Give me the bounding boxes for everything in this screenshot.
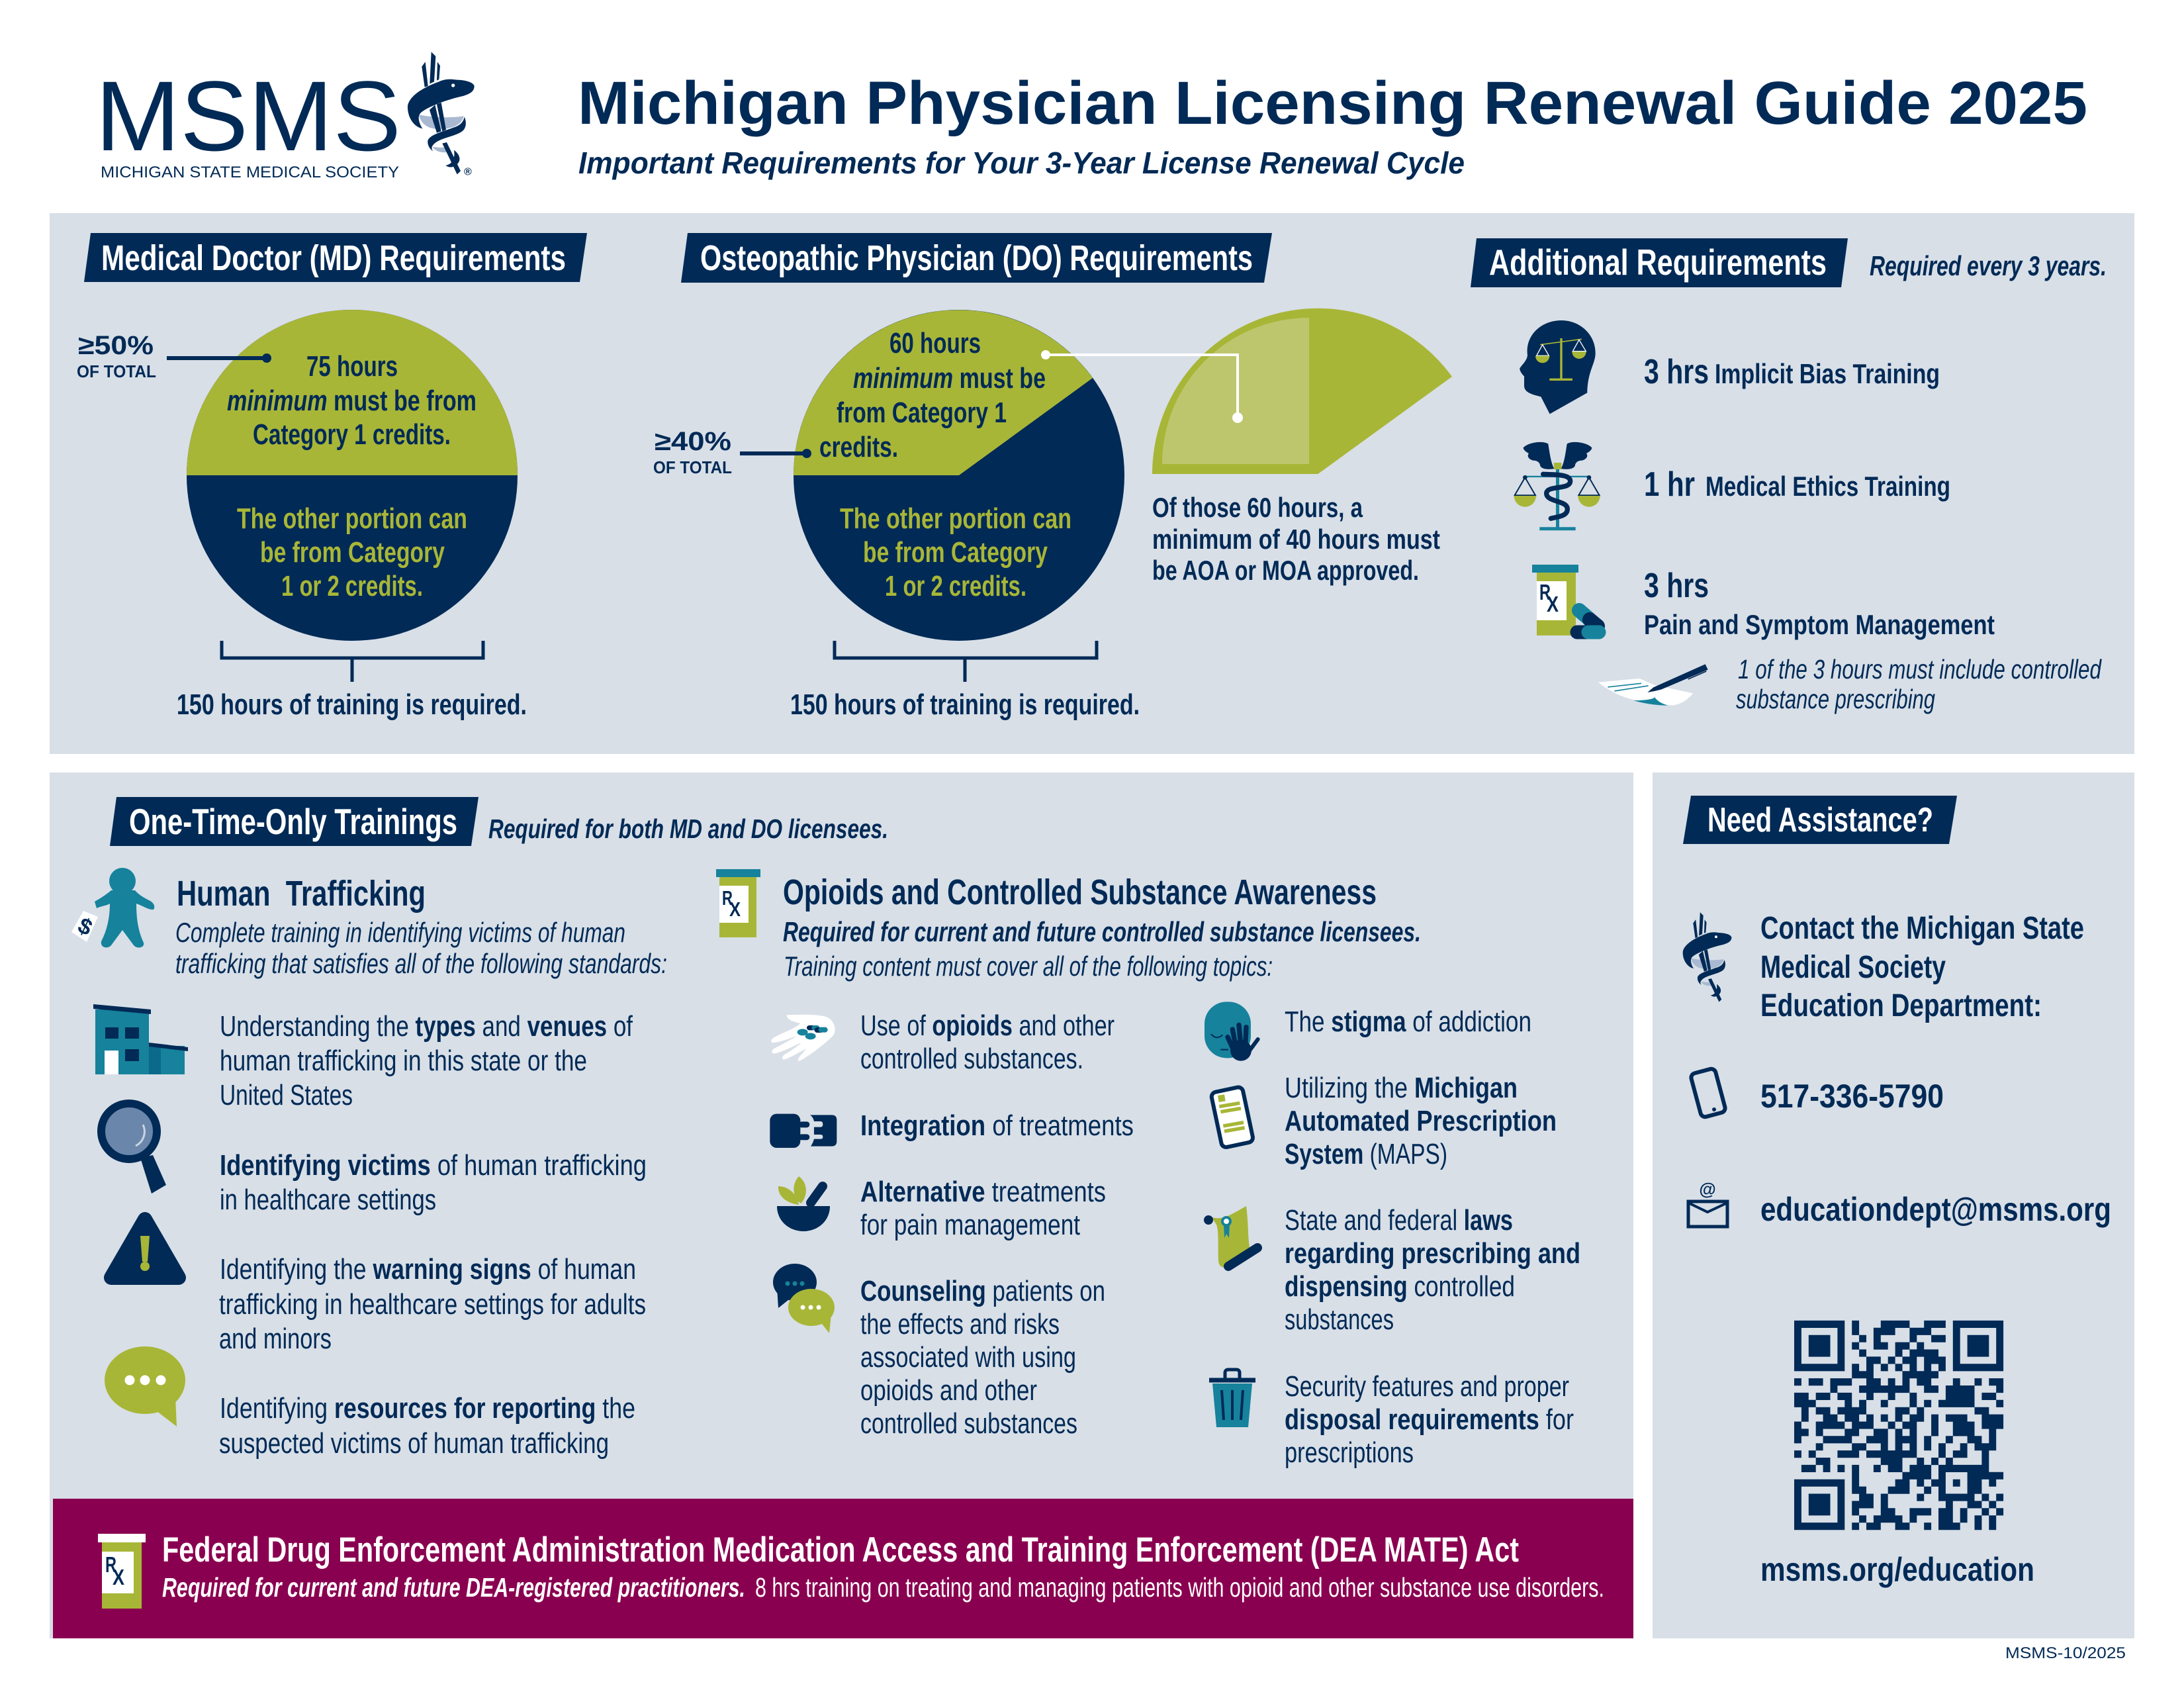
text: resources for reporting bbox=[219, 1392, 635, 1460]
icon: hand with pills bbox=[771, 1015, 835, 1061]
text: opioids intro: Training content must cover all of the following topics: bbox=[784, 951, 1273, 982]
heading: opioids: Opioids and Controlled Substance Awareness bbox=[783, 872, 1377, 912]
icon: face with stop hand bbox=[1205, 1002, 1258, 1061]
icon: mortar and pestle bbox=[777, 1176, 830, 1231]
heading: additional requirements: Additional Requirements bbox=[1489, 242, 1827, 283]
icon: magnifying glass bbox=[101, 1103, 166, 1194]
title: Michigan Physician Licensing Renewal Guide 2025 bbox=[578, 70, 2087, 137]
pie chart: MD hours: The other portion can bbox=[237, 502, 467, 535]
text: phone number: 517-336-5790 bbox=[1760, 1078, 1944, 1115]
text: counseling patients: the effects and risks bbox=[860, 1308, 1060, 1340]
icon: prescription bottle with capsules: X bbox=[1547, 592, 1559, 616]
heading: need assistance bbox=[1683, 796, 1957, 844]
heading: DO requirements bbox=[681, 233, 1272, 283]
heading: one-time-only trainings bbox=[110, 797, 478, 846]
text: counseling patients: controlled substances bbox=[860, 1407, 1077, 1440]
icon: building bbox=[93, 1004, 188, 1074]
text: types and venues bbox=[220, 1010, 633, 1111]
callout: at least 50 percent: ≥50% bbox=[78, 331, 154, 360]
text: alternative treatments: Alternative treatments bbox=[860, 1176, 1106, 1208]
icon: prescription bottle with capsules: R bbox=[1539, 580, 1551, 604]
text: AOA or MOA note bbox=[1152, 492, 1440, 586]
pie chart: MD hours: Category 1 credits. bbox=[253, 418, 451, 451]
icon: small prescription bottle: X bbox=[729, 898, 741, 921]
icon: speech bubble bbox=[105, 1346, 185, 1427]
heading: one-time-only trainings: One-Time-Only Trainings bbox=[129, 801, 457, 842]
heading: DO requirements: Osteopathic Physician (DO) Requirements bbox=[700, 238, 1253, 278]
chart: enlarged wedge of DO category 1 hours bbox=[1152, 308, 1452, 474]
icon: email envelope: @ bbox=[1699, 1179, 1716, 1199]
icon: head with scales bbox=[1520, 320, 1596, 414]
heading: need assistance: Need Assistance? bbox=[1707, 801, 1933, 839]
bracket: MD 150 hours: 150 hours of training is required. bbox=[177, 688, 527, 721]
text: contact: Contact the Michigan State bbox=[1760, 911, 2084, 946]
icon: trash can bbox=[1209, 1370, 1255, 1427]
text: identifying victims bbox=[220, 1149, 647, 1216]
callout: at least 40 percent: ≥40% bbox=[655, 427, 731, 456]
text: state and federal laws: dispensing controlled bbox=[1285, 1270, 1515, 1303]
text: email address: educationdept@msms.org bbox=[1760, 1191, 2111, 1228]
icon: trafficked person with price tag: $ bbox=[74, 913, 96, 941]
pie chart: DO hours bbox=[794, 310, 1124, 641]
icon: pen and prescription paper bbox=[1598, 664, 1708, 706]
text: pain and symptom management: Pain and Symptom Management bbox=[1644, 609, 1995, 640]
text: MAPS: System (MAPS) bbox=[1285, 1138, 1447, 1170]
text: identifying victims: Identifying victims of human trafficking bbox=[220, 1149, 647, 1182]
text: MAPS bbox=[1285, 1072, 1557, 1170]
note: required for both: Required for both MD and DO licensees. bbox=[488, 814, 888, 844]
text: medical ethics training: Medical Ethics Training bbox=[1706, 471, 1950, 502]
text: pain and symptom management bbox=[1644, 567, 1995, 640]
icon: bottle on banner: X bbox=[113, 1565, 124, 1589]
text: opioids intro: Required for current and future controlled substance licensees. bbox=[783, 916, 1421, 947]
QR code bbox=[1794, 1324, 2003, 1526]
icon: chat bubbles bbox=[773, 1264, 835, 1333]
text: use of opioids: Use of opioids and other bbox=[860, 1009, 1115, 1042]
text: security and disposal: Security features and proper bbox=[1285, 1370, 1569, 1403]
pie chart: MD hours: minimum must be from bbox=[227, 385, 477, 417]
text: contact: Education Department: bbox=[1760, 988, 2042, 1023]
text: counseling patients: Counseling patients on bbox=[860, 1275, 1105, 1307]
pie chart: DO hours: The other portion can bbox=[840, 502, 1071, 535]
text: security and disposal: prescriptions bbox=[1285, 1436, 1414, 1469]
pie chart: DO hours: minimum must be bbox=[853, 362, 1046, 395]
icon: plug bbox=[770, 1114, 837, 1148]
icon: scroll with ribbon bbox=[1204, 1206, 1257, 1268]
text: controlled substance note bbox=[1736, 654, 2102, 714]
text: controlled substance note: substance prescribing bbox=[1736, 684, 1935, 714]
footer code: MSMS-10/2025 bbox=[2005, 1644, 2126, 1662]
heading: MD requirements: Medical Doctor (MD) Requirements bbox=[101, 238, 566, 278]
text: use of opioids: controlled substances. bbox=[860, 1043, 1083, 1075]
text: types and venues: United States bbox=[220, 1079, 353, 1111]
panel: need assistance bbox=[1653, 773, 2134, 1638]
text: types and venues: Understanding the types and venues of bbox=[220, 1010, 633, 1043]
banner: DEA MATE Act: 8 hrs training on treating and managing patients with opioid and other substance use disorders. bbox=[755, 1572, 1604, 1603]
MSMS logo: MSMS bbox=[95, 60, 401, 171]
pie chart: MD hours: 1 or 2 credits. bbox=[281, 570, 423, 602]
text: security and disposal: disposal requirements for bbox=[1285, 1403, 1574, 1436]
heading: human trafficking: Human Trafficking bbox=[177, 874, 426, 914]
text: warning signs: trafficking in healthcare settings for adults bbox=[219, 1288, 646, 1321]
text: resources for reporting: suspected victims of human trafficking bbox=[219, 1427, 609, 1460]
text: use of opioids bbox=[860, 1009, 1115, 1075]
pie chart: DO hours: be from Category bbox=[863, 536, 1048, 569]
text: integration: Integration of treatments bbox=[860, 1109, 1134, 1142]
text: security and disposal bbox=[1285, 1370, 1574, 1469]
panel: one-time-only trainings bbox=[50, 773, 1633, 1638]
pie chart: MD hours: 75 hours bbox=[306, 350, 398, 383]
bracket: DO 150 hours: 150 hours of training is required. bbox=[790, 688, 1140, 721]
note: required every 3 years: Required every 3 years. bbox=[1870, 250, 2107, 281]
text: human trafficking intro bbox=[175, 917, 667, 979]
text: warning signs: Identifying the warning signs of human bbox=[220, 1253, 636, 1286]
text: AOA or MOA note: Of those 60 hours, a bbox=[1152, 492, 1363, 523]
text: implicit bias training: Implicit Bias Training bbox=[1715, 358, 1940, 389]
text: human trafficking intro: Complete training in identifying victims of human bbox=[175, 917, 625, 948]
icon: trafficked person with price tag bbox=[71, 868, 154, 947]
icon: phone bbox=[1690, 1068, 1726, 1118]
text: identifying victims: in healthcare settings bbox=[220, 1184, 436, 1216]
icon: prescription bottle with capsules bbox=[1532, 565, 1599, 635]
MSMS logo: ® bbox=[464, 166, 472, 177]
icon: MSMS snake emblem bbox=[1683, 912, 1731, 1002]
text: stigma: The stigma of addiction bbox=[1285, 1006, 1531, 1038]
text: counseling patients: associated with using bbox=[860, 1341, 1076, 1374]
banner: DEA MATE Act: Federal Drug Enforcement Administration Medication Access and Training Enforcement (DEA MATE) Act bbox=[162, 1530, 1519, 1570]
text: MAPS: Automated Prescription bbox=[1285, 1105, 1557, 1137]
bracket: DO 150 hours bbox=[790, 641, 1140, 721]
text: state and federal laws: substances bbox=[1285, 1303, 1394, 1336]
icon: email envelope bbox=[1688, 1179, 1727, 1227]
text: contact bbox=[1760, 911, 2084, 1023]
pie chart: MD hours bbox=[187, 310, 518, 641]
text: warning signs: and minors bbox=[219, 1323, 332, 1355]
text: alternative treatments bbox=[860, 1176, 1106, 1241]
icon: bottle on banner bbox=[98, 1534, 146, 1609]
heading: additional requirements bbox=[1471, 238, 1848, 287]
icon: small prescription bottle bbox=[716, 869, 760, 937]
text: warning signs bbox=[219, 1253, 646, 1355]
callout: at least 40 percent bbox=[653, 427, 811, 477]
heading: MD requirements bbox=[84, 233, 587, 282]
text: state and federal laws: regarding prescribing and bbox=[1285, 1237, 1580, 1270]
pie chart: DO hours: 60 hours bbox=[889, 327, 981, 359]
text: MAPS: Utilizing the Michigan bbox=[1285, 1072, 1518, 1104]
pie chart: DO hours: credits. bbox=[819, 431, 898, 463]
callout: at least 40 percent: OF TOTAL bbox=[653, 457, 732, 477]
banner: DEA MATE Act bbox=[53, 1499, 1633, 1638]
panel: licence requirements bbox=[50, 213, 2134, 754]
callout: at least 50 percent: OF TOTAL bbox=[77, 361, 156, 381]
text: alternative treatments: for pain management bbox=[860, 1209, 1080, 1241]
text: implicit bias training bbox=[1644, 353, 1940, 391]
text: opioids intro bbox=[783, 916, 1421, 982]
text: state and federal laws bbox=[1285, 1204, 1580, 1336]
pie chart: MD hours: be from Category bbox=[260, 536, 445, 569]
icon: warning triangle bbox=[111, 1219, 179, 1278]
icon: bottle on banner: R bbox=[105, 1552, 116, 1577]
text: website: msms.org/education bbox=[1760, 1551, 2034, 1588]
pie chart: DO hours: from Category 1 bbox=[837, 397, 1007, 429]
text: state and federal laws: State and federal laws bbox=[1285, 1204, 1513, 1237]
text: counseling patients: opioids and other bbox=[860, 1374, 1037, 1407]
text: contact: Medical Society bbox=[1760, 950, 1946, 985]
icon: caduceus and scales bbox=[1514, 442, 1600, 530]
text: resources for reporting: Identifying resources for reporting the bbox=[220, 1392, 635, 1425]
callout: at least 50 percent bbox=[77, 331, 271, 381]
bracket: MD 150 hours bbox=[177, 641, 527, 721]
text: medical ethics training bbox=[1644, 465, 1950, 504]
MSMS logo: MICHIGAN STATE MEDICAL SOCIETY bbox=[101, 164, 399, 181]
text: types and venues: human trafficking in this state or the bbox=[220, 1045, 587, 1077]
pie chart: DO hours: 1 or 2 credits. bbox=[885, 570, 1026, 602]
icon: small prescription bottle: R bbox=[722, 886, 733, 910]
text: pain and symptom management: 3 hrs bbox=[1644, 567, 1709, 605]
MSMS logo bbox=[95, 52, 475, 181]
text: counseling patients bbox=[860, 1275, 1105, 1440]
banner: DEA MATE Act: Required for current and future DEA-registered practitioners. bbox=[162, 1572, 745, 1603]
text: AOA or MOA note: be AOA or MOA approved. bbox=[1152, 555, 1419, 586]
text: AOA or MOA note: minimum of 40 hours must bbox=[1152, 524, 1440, 555]
connector: pie to wedge bbox=[1041, 350, 1243, 423]
icon: smartphone with records bbox=[1210, 1086, 1253, 1148]
subtitle: Important Requirements for Your 3-Year License Renewal Cycle bbox=[578, 146, 1465, 180]
text: implicit bias training: 3 hrs bbox=[1644, 353, 1709, 391]
text: medical ethics training: 1 hr bbox=[1644, 465, 1695, 504]
text: human trafficking intro: trafficking that satisfies all of the following standards: bbox=[175, 948, 667, 979]
